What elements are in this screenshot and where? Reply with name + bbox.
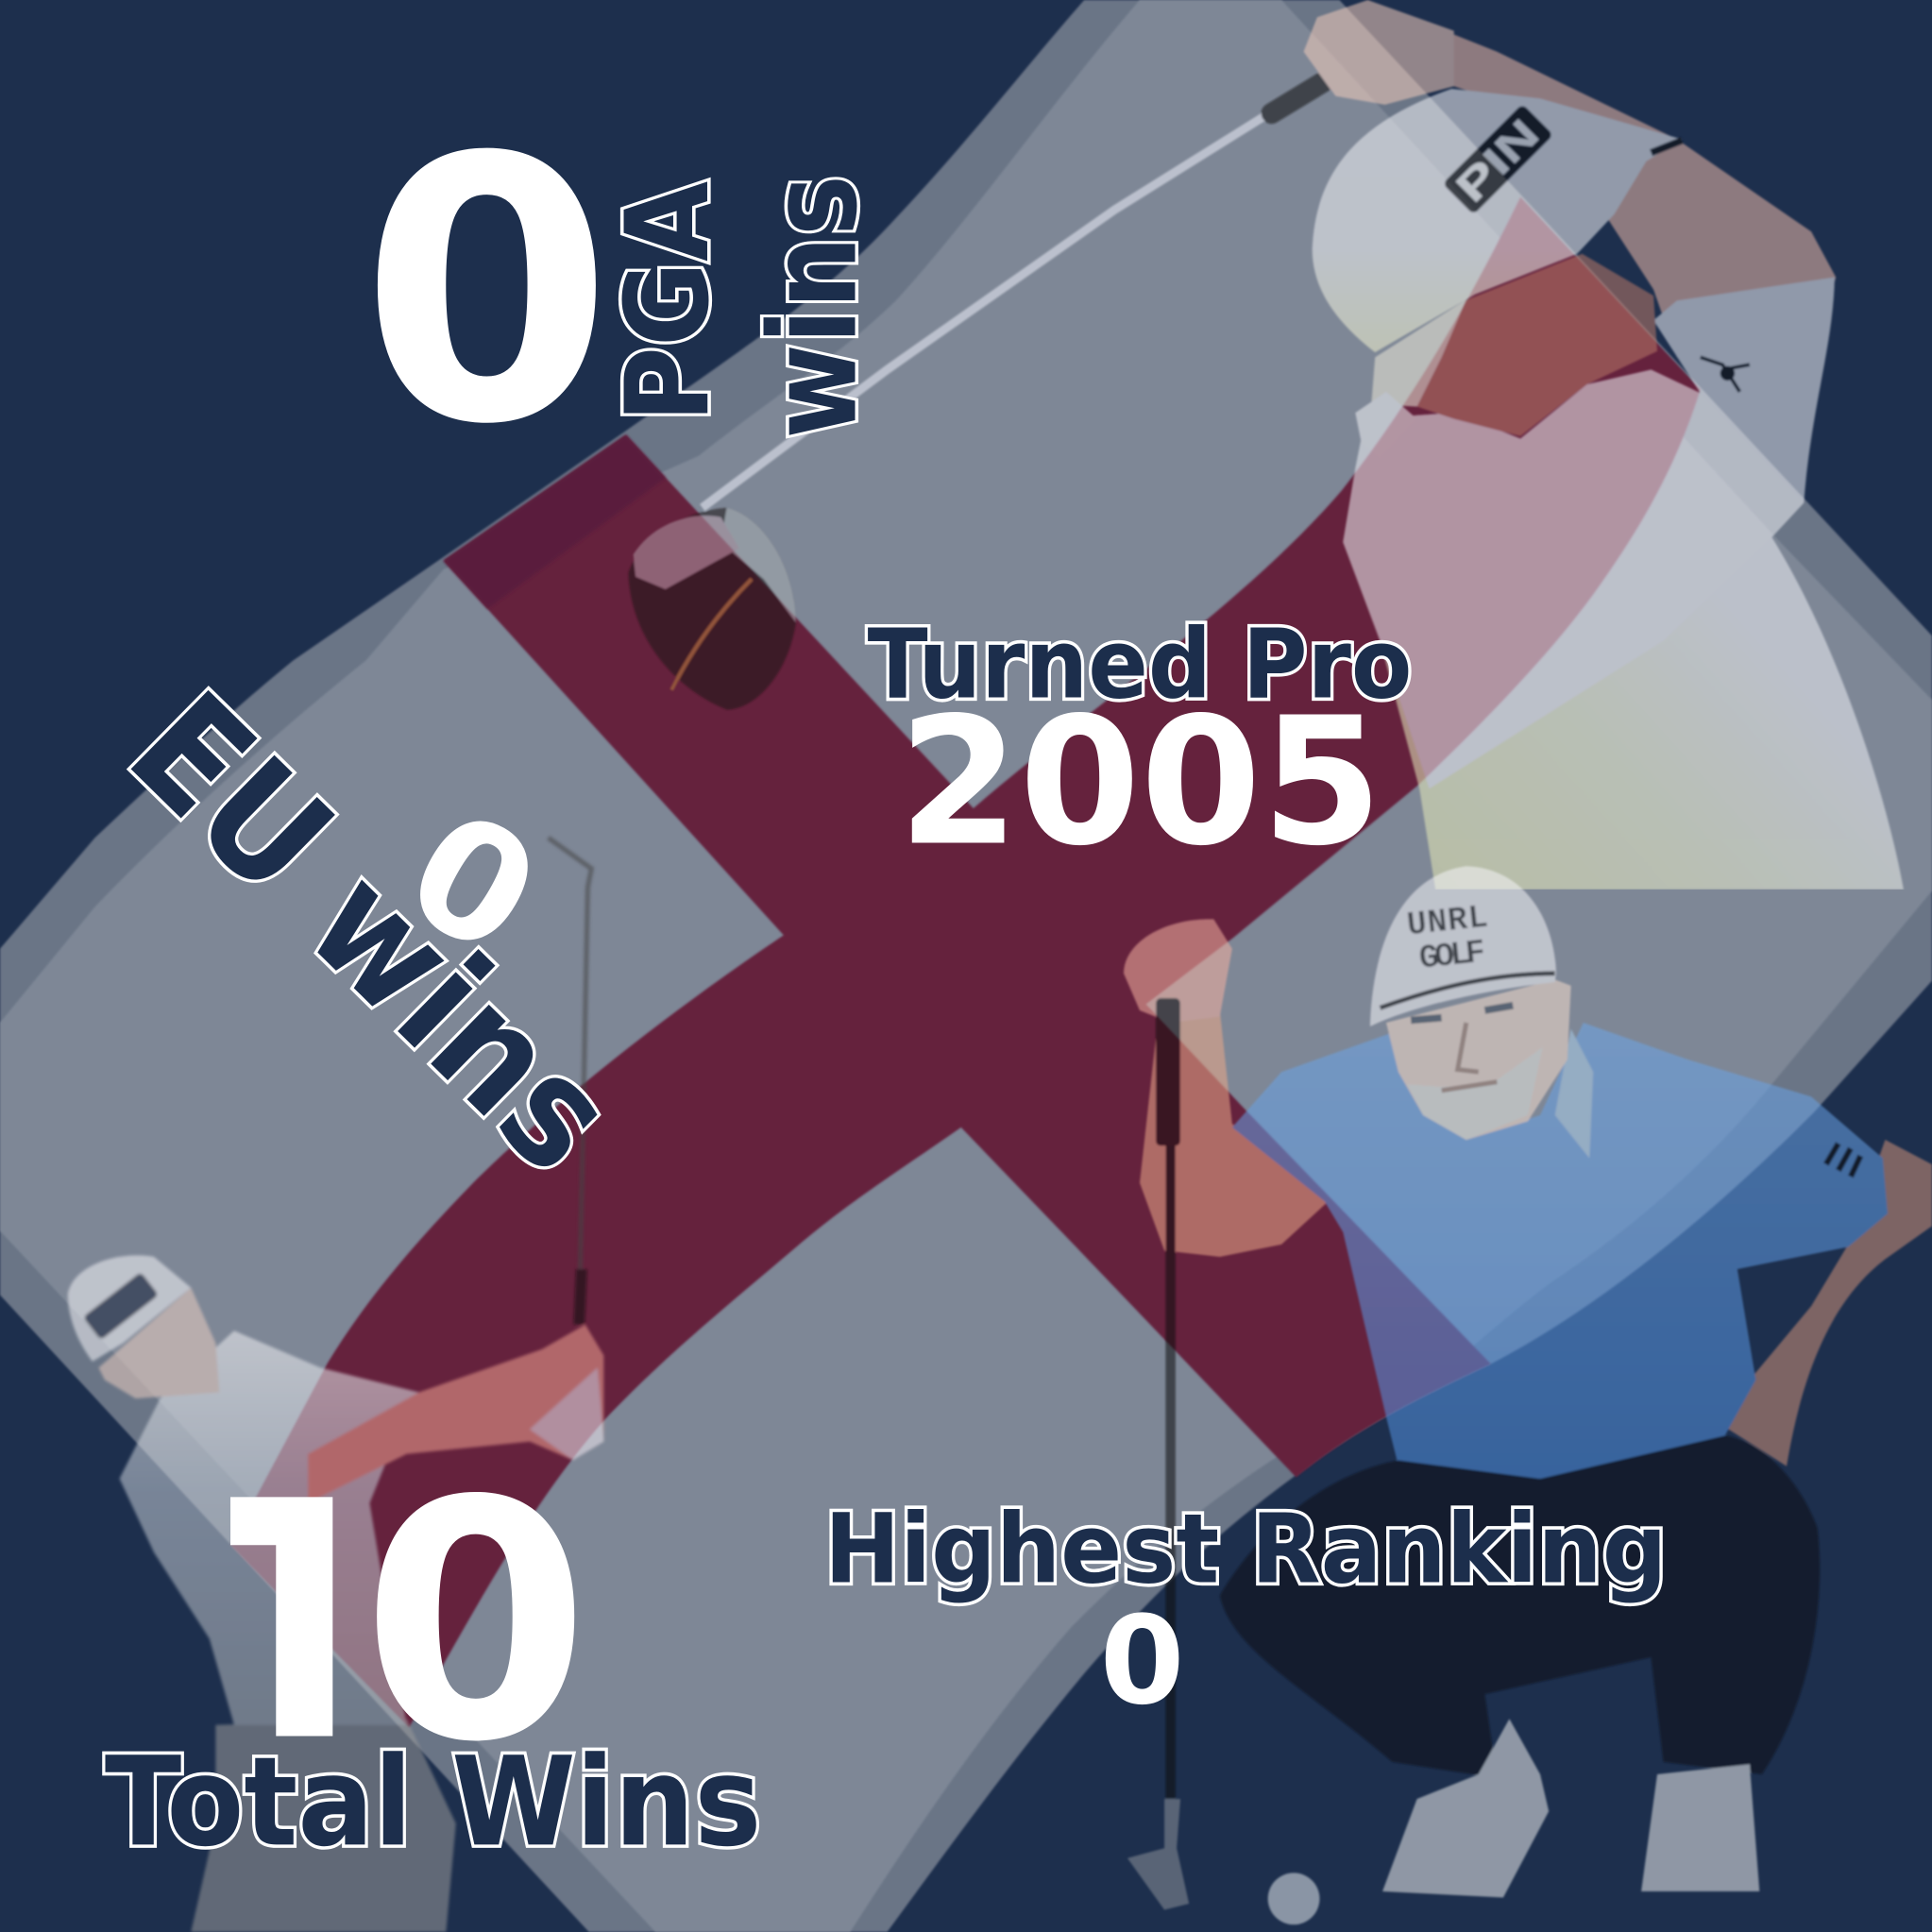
dark stripe on cross — [444, 435, 666, 609]
eyes — [1411, 1006, 1513, 1020]
nose and mouth — [1442, 1023, 1497, 1091]
club head — [628, 508, 796, 710]
digit zero: 0 — [361, 1432, 590, 1815]
ear and hair — [1371, 299, 1466, 407]
hat text: UNRL — [1405, 899, 1490, 944]
glove — [530, 1367, 603, 1460]
stat: highest ranking: 0 — [1100, 1590, 1185, 1732]
hat text — [1405, 899, 1494, 979]
club grip — [579, 1269, 582, 1325]
stat: total wins count — [230, 1432, 590, 1815]
putter grip — [1156, 998, 1180, 1146]
label: Highest Ranking: Highest Ranking — [824, 1494, 1667, 1605]
label: Turned Pro: Turned Pro — [868, 610, 1412, 721]
shirt — [1383, 536, 1905, 890]
label: Total Wins: Total Wins — [105, 1730, 761, 1873]
brim tip — [1651, 141, 1682, 153]
face — [98, 1288, 219, 1398]
sleeve logo — [1826, 1144, 1860, 1177]
far arm — [1698, 1140, 1932, 1466]
right shoe — [1641, 1765, 1759, 1891]
polo shirt — [1232, 1023, 1888, 1479]
cap logo: PIN — [1448, 110, 1549, 212]
left shoe — [1382, 1719, 1549, 1897]
label: PGA: PGA — [601, 181, 735, 423]
club shaft — [703, 113, 1269, 508]
label: EU wins: EU wins — [97, 660, 648, 1206]
cap logo — [1442, 104, 1555, 216]
hand — [1124, 919, 1232, 1023]
hat band — [1380, 974, 1555, 1008]
cap — [1313, 89, 1682, 352]
collar — [1555, 1029, 1593, 1159]
head — [1386, 979, 1571, 1140]
beard — [1407, 1047, 1543, 1140]
trousers — [1220, 1435, 1820, 1778]
stat: turned pro year: 2005 — [898, 681, 1382, 886]
forearm and upper arm — [1367, 0, 1836, 357]
golf ball — [1268, 1873, 1319, 1924]
hat — [1370, 866, 1556, 1026]
hat text: GOLF — [1417, 934, 1487, 978]
golfer: bottom left swing — [68, 838, 603, 1932]
stat: PGA wins count: 0 — [361, 80, 613, 503]
golfer: top right swing — [628, 0, 1904, 890]
shirt — [120, 1330, 419, 1725]
cap logo — [82, 1272, 159, 1341]
sleeve logo — [1701, 357, 1750, 392]
hand — [1304, 0, 1454, 105]
trousers — [191, 1719, 456, 1932]
cap — [68, 1255, 191, 1362]
putter shaft — [1167, 1084, 1175, 1799]
golfer: bottom right putting — [1124, 866, 1932, 1924]
red cross — [230, 197, 1701, 1727]
digit one — [230, 1497, 332, 1737]
upper shirt — [1343, 414, 1658, 788]
stat: EU wins count: 0 — [377, 775, 567, 992]
raised arm — [1140, 1010, 1329, 1257]
face — [1417, 254, 1657, 436]
sleeve — [1653, 277, 1836, 502]
arm — [308, 1325, 603, 1503]
club grip — [1272, 72, 1341, 113]
club — [549, 838, 591, 1325]
collar — [1354, 393, 1414, 440]
putter head — [1127, 1799, 1189, 1910]
label: wins: wins — [744, 175, 885, 439]
